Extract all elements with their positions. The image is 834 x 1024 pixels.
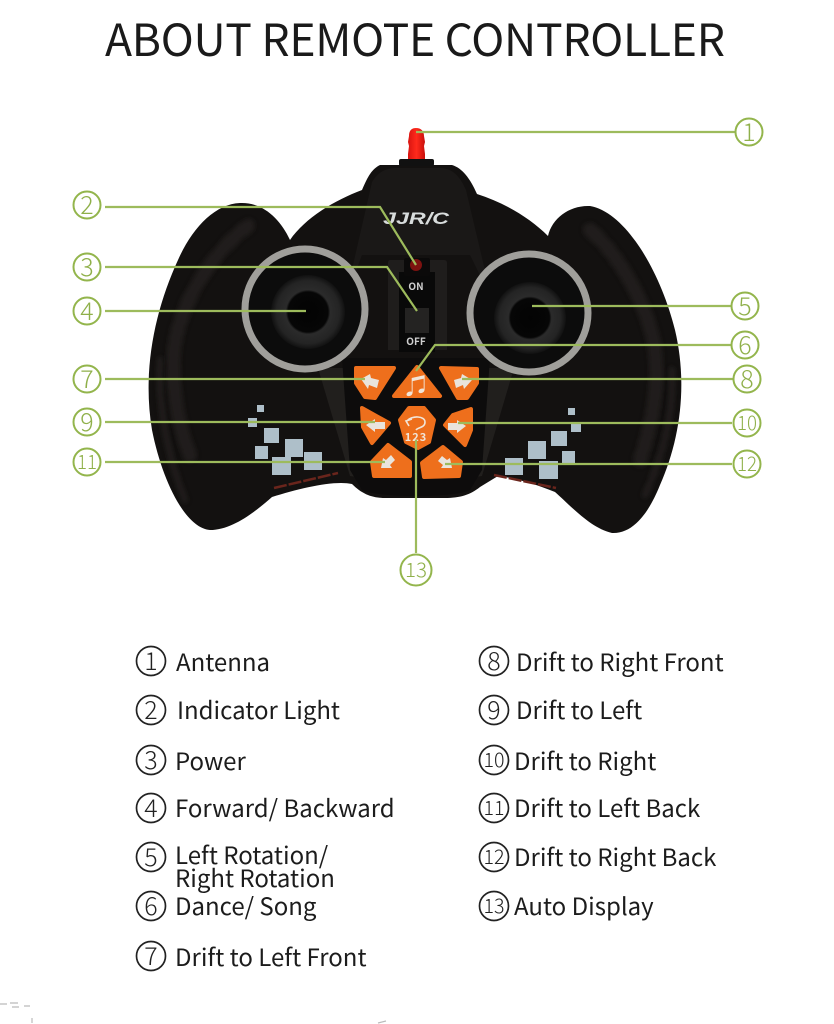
legend item 10: 10 bbox=[484, 744, 504, 773]
legend item 1: Antenna bbox=[176, 643, 270, 678]
title: ABOUT REMOTE CONTROLLER bbox=[105, 4, 725, 69]
legend item 12: Drift to Right Back bbox=[514, 838, 716, 873]
legend item 9: Drift to Left bbox=[516, 691, 642, 726]
button: drift left back bbox=[372, 445, 410, 476]
callout numbers: 10 bbox=[737, 407, 757, 436]
controller body silhouette bbox=[149, 165, 681, 533]
right joystick bbox=[470, 254, 588, 372]
remote controller photo bbox=[149, 128, 681, 533]
legend item 5: Right Rotation bbox=[175, 859, 335, 894]
legend item 5: Left Rotation/ bbox=[175, 836, 329, 871]
legend item 13: Auto Display bbox=[514, 887, 654, 922]
left joystick bbox=[245, 249, 365, 369]
legend item 1: 1 bbox=[144, 642, 158, 678]
legend item 3 bbox=[136, 741, 246, 777]
button: drift right front bbox=[441, 368, 477, 398]
left checker pattern bbox=[248, 405, 338, 488]
callout numbers: 2 bbox=[80, 186, 94, 222]
antenna bbox=[399, 128, 434, 166]
left grip texture bbox=[160, 226, 248, 500]
legend item 4: 4 bbox=[144, 789, 158, 825]
legend item 6: Dance/ Song bbox=[175, 887, 317, 922]
legend item 5: 5 bbox=[144, 838, 158, 874]
legend right column bbox=[480, 642, 724, 922]
callout numbers: 5 bbox=[738, 287, 752, 323]
legend item 11: 11 bbox=[484, 792, 504, 821]
button: dance song: ♫ bbox=[406, 369, 428, 401]
legend item 2: 2 bbox=[144, 691, 158, 727]
callout numbers: 13 bbox=[405, 554, 427, 583]
button: drift right bbox=[445, 409, 471, 445]
button surround trim bbox=[318, 358, 514, 496]
centre tower highlight bbox=[345, 168, 492, 300]
legend item 12: 12 bbox=[484, 841, 504, 870]
callout lines bbox=[105, 132, 735, 553]
legend item 7: 7 bbox=[144, 937, 158, 973]
legend item 6: 6 bbox=[144, 887, 158, 923]
legend left column bbox=[136, 642, 395, 973]
legend item 3: Power bbox=[175, 742, 246, 777]
callout numbers: 1 bbox=[742, 113, 756, 149]
power switch panel bbox=[388, 258, 447, 352]
legend item 4: Forward/ Backward bbox=[175, 789, 395, 824]
legend item 9: 9 bbox=[487, 691, 501, 727]
callout numbers: 7 bbox=[80, 360, 94, 396]
legend item 8: Drift to Right Front bbox=[516, 643, 724, 678]
callout numbers: 12 bbox=[737, 448, 757, 477]
right grip texture bbox=[590, 230, 672, 495]
callout numbers: 3 bbox=[80, 248, 94, 284]
button: drift right back bbox=[422, 447, 461, 477]
right checker pattern bbox=[494, 408, 581, 488]
legend item 3: 3 bbox=[144, 741, 158, 777]
legend item 7: Drift to Left Front bbox=[175, 938, 366, 973]
power switch panel: ON bbox=[408, 278, 424, 293]
button: drift left front bbox=[356, 368, 394, 398]
callout numbers: 8 bbox=[740, 360, 754, 396]
callout numbers: 6 bbox=[738, 326, 752, 362]
callout numbers: 4 bbox=[80, 292, 94, 328]
power switch panel: OFF bbox=[406, 333, 426, 348]
legend item 10: Drift to Right bbox=[514, 742, 656, 777]
callout numbers bbox=[74, 113, 762, 586]
legend item 11: Drift to Left Back bbox=[514, 789, 700, 824]
legend item 5 bbox=[136, 836, 335, 894]
button: auto display: 123 bbox=[405, 429, 427, 445]
logo: JJR/C bbox=[383, 209, 450, 228]
legend item 8: 8 bbox=[487, 642, 501, 678]
button: drift left bbox=[362, 408, 389, 443]
legend item 13: 13 bbox=[484, 890, 504, 919]
legend item 2: Indicator Light bbox=[177, 691, 340, 726]
callout numbers: 9 bbox=[80, 403, 94, 439]
legend item 1 bbox=[136, 642, 270, 678]
button cluster bbox=[356, 367, 477, 477]
callout numbers: 11 bbox=[77, 446, 97, 475]
